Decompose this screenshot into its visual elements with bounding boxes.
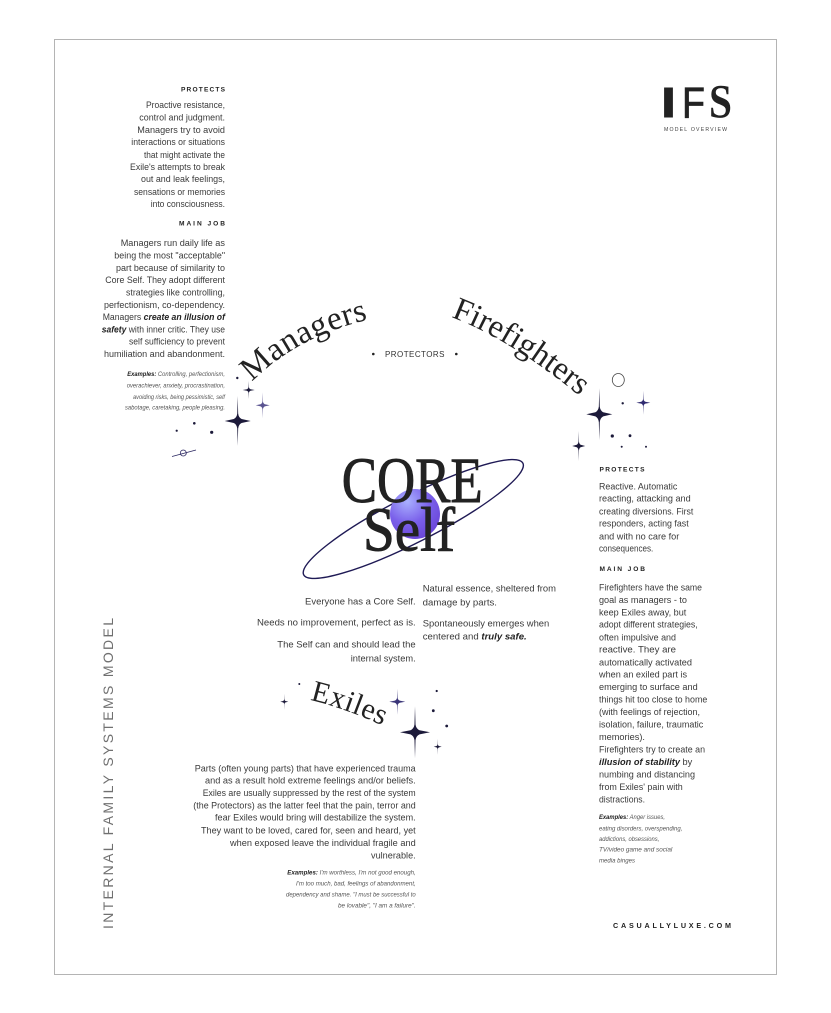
core self: planet and title xyxy=(293,443,533,595)
label: protectors: PROTECTORS xyxy=(385,350,444,359)
text block: core self right: damage by parts. xyxy=(423,597,497,608)
text block: core self right xyxy=(423,583,556,643)
text block: managers main job: being the most "acceptable" xyxy=(114,250,225,262)
text block: firefighters protects: reacting, attacking and xyxy=(599,494,691,505)
website credit: CASUALLYLUXE.COM xyxy=(613,921,731,930)
text block: firefighters main job: often impulsive and xyxy=(599,632,676,643)
text block: managers main job: safety with inner critic. They use xyxy=(102,324,225,336)
examples: firefighters: Examples: Anger issues, xyxy=(599,814,665,821)
text block: core self right: centered and truly safe. xyxy=(423,632,527,643)
text block: core self left: Everyone has a Core Self. xyxy=(305,597,416,608)
text block: exiles: when exposed leave the individual fragile and xyxy=(229,838,416,849)
icon: small planet xyxy=(172,450,196,456)
text block: managers protects: Proactive resistance, xyxy=(146,100,225,111)
heading: Managers (curved): Managers xyxy=(238,306,366,381)
sparkles: firefighters xyxy=(572,374,650,461)
examples: managers: avoiding risks, being pessimistic, self xyxy=(133,394,226,401)
text block: firefighters main job: Firefighters try to create an xyxy=(599,744,705,755)
text block: firefighters main job: memories). xyxy=(599,732,645,743)
text block: core self left xyxy=(257,597,416,664)
logo: IFS model overview: S xyxy=(709,76,732,128)
text block: firefighters main job: (with feelings of rejection, xyxy=(599,707,700,718)
text block: firefighters main job: from Exiles' pain with xyxy=(599,782,683,793)
title: CORE: CORE xyxy=(342,445,483,517)
text block: firefighters main job: things hit too close to home xyxy=(599,695,707,706)
text block: core self left: Needs no improvement, perfect as is. xyxy=(257,617,416,628)
text block: managers protects: that might activate the xyxy=(144,150,225,161)
text block: firefighters main job: keep Exiles away, but xyxy=(599,607,687,618)
text block: exiles: and as a result hold extreme feelings and/or beliefs. xyxy=(205,776,416,787)
examples: firefighters: TV/video game and social xyxy=(599,846,673,853)
vertical title: INTERNAL FAMILY SYSTEMS MODEL xyxy=(100,618,116,929)
text block: managers protects: control and judgment. xyxy=(139,112,225,124)
text block: firefighters protects xyxy=(599,481,694,555)
logo: IFS model overview: I xyxy=(660,78,677,128)
text block: firefighters main job: emerging to surface and xyxy=(599,682,698,693)
text block: exiles: (the Protectors) as the latter feel that the pain, terror and xyxy=(193,800,416,811)
text block: managers main job: self sufficiency to prevent xyxy=(129,336,225,348)
text block: managers main job xyxy=(102,238,226,360)
heading: firefighters protects: PROTECTS xyxy=(600,466,645,474)
text block: firefighters main job: numbing and distancing xyxy=(599,770,695,781)
examples: managers xyxy=(125,371,226,412)
examples: firefighters: addictions, obsessions, xyxy=(599,836,659,843)
heading: Exiles (curved): Exiles xyxy=(310,681,386,724)
heading: Firefighters (curved): Firefighters xyxy=(452,298,588,394)
text block: managers protects: interactions or situations xyxy=(131,137,225,148)
text block: managers main job: Managers create an illusion of xyxy=(103,312,226,323)
examples: exiles xyxy=(286,870,416,910)
text block: managers protects: Managers try to avoid xyxy=(137,125,225,136)
sparkles: managers xyxy=(176,377,270,446)
text block: core self right: Natural essence, sheltered from xyxy=(423,583,556,594)
logo: IFS model overview: MODEL OVERVIEW xyxy=(664,127,727,133)
examples: managers: Examples: Controlling, perfectionism, xyxy=(127,371,225,378)
examples: exiles: dependency and shame. "I must be successful to xyxy=(286,892,416,898)
text block: firefighters main job xyxy=(598,583,707,806)
text block: firefighters main job: automatically activated xyxy=(599,657,692,668)
text block: core self left: internal system. xyxy=(351,653,416,664)
examples: managers: sabotage, caretaking, people pleasing. xyxy=(125,404,225,412)
text block: core self right: Spontaneously emerges when xyxy=(423,618,549,629)
examples: firefighters xyxy=(599,814,682,864)
heading: managers main job: MAIN JOB xyxy=(179,220,225,228)
text block: managers protects: sensations or memories xyxy=(134,187,225,198)
examples: exiles: be lovable", "I am a failure". xyxy=(338,902,416,910)
text block: managers main job: humiliation and abandonment. xyxy=(104,349,225,360)
text block: exiles: Parts (often young parts) that have experienced trauma xyxy=(195,763,416,774)
text block: exiles: Exiles are usually suppressed by the rest of the system xyxy=(203,788,416,799)
text block: managers protects: into consciousness. xyxy=(151,199,225,210)
heading: firefighters main job: MAIN JOB xyxy=(600,566,645,573)
text block: firefighters main job: adopt different strategies, xyxy=(599,620,698,631)
icon: sphere xyxy=(390,489,440,539)
text block: firefighters main job: isolation, failure, traumatic xyxy=(599,719,703,730)
text block: firefighters main job: reactive. They are xyxy=(599,645,676,656)
sparkles: exiles xyxy=(280,683,448,758)
examples: exiles: Examples: I'm worthless, I'm not good enough, xyxy=(287,870,416,876)
text block: exiles: They want to be loved, cared for, seen and heard, yet xyxy=(201,825,416,836)
text block: managers main job: part because of similarity to xyxy=(116,263,225,274)
examples: firefighters: eating disorders, overspending, xyxy=(599,825,682,832)
icon: ring xyxy=(293,443,533,595)
text block: firefighters protects: creating diversions. First xyxy=(599,506,694,517)
panel: managers text xyxy=(102,86,226,412)
text block: firefighters main job: distractions. xyxy=(599,795,645,806)
text block: exiles: vulnerable. xyxy=(371,851,416,862)
text block: managers main job: perfectionism, co-dependency. xyxy=(104,300,225,311)
title: Self: Self xyxy=(363,496,455,564)
text block: firefighters main job: when an exiled part is xyxy=(598,670,687,681)
text block: core self left: The Self can and should lead the xyxy=(277,639,416,650)
examples: exiles: I'm too much, bad, feelings of abandonment, xyxy=(296,880,416,888)
text block: managers main job: strategies like controlling, xyxy=(126,288,225,298)
examples: firefighters: media binges xyxy=(599,857,635,864)
examples: managers: overachiever, anxiety, procrastination, xyxy=(127,382,225,390)
text block: firefighters protects: and with no care for xyxy=(599,531,680,542)
text block: firefighters main job: Firefighters have the same xyxy=(599,583,702,594)
logo: IFS model overview xyxy=(660,76,732,133)
label: protectors xyxy=(372,350,458,359)
text block: managers protects: Exile's attempts to break xyxy=(130,162,225,173)
text block: managers protects xyxy=(130,100,225,210)
text block: firefighters main job: goal as managers - to xyxy=(599,595,687,606)
text block: managers protects: out and leak feelings, xyxy=(141,174,225,185)
text block: firefighters main job: illusion of stability by xyxy=(599,757,692,768)
text block: firefighters protects: Reactive. Automatic xyxy=(599,481,677,492)
text block: managers main job: Managers run daily life as xyxy=(121,238,225,249)
text block: exiles xyxy=(193,763,416,862)
heading: managers protects: PROTECTS xyxy=(181,86,226,94)
panel: firefighters text xyxy=(598,466,707,864)
logo: IFS model overview: F xyxy=(682,78,705,128)
text block: firefighters protects: consequences. xyxy=(599,544,653,555)
text block: managers main job: Core Self. They adopt different xyxy=(105,275,225,286)
text block: firefighters protects: responders, acting fast xyxy=(599,519,689,530)
text block: exiles: fear Exiles would bring will destabilize the system. xyxy=(215,813,416,824)
